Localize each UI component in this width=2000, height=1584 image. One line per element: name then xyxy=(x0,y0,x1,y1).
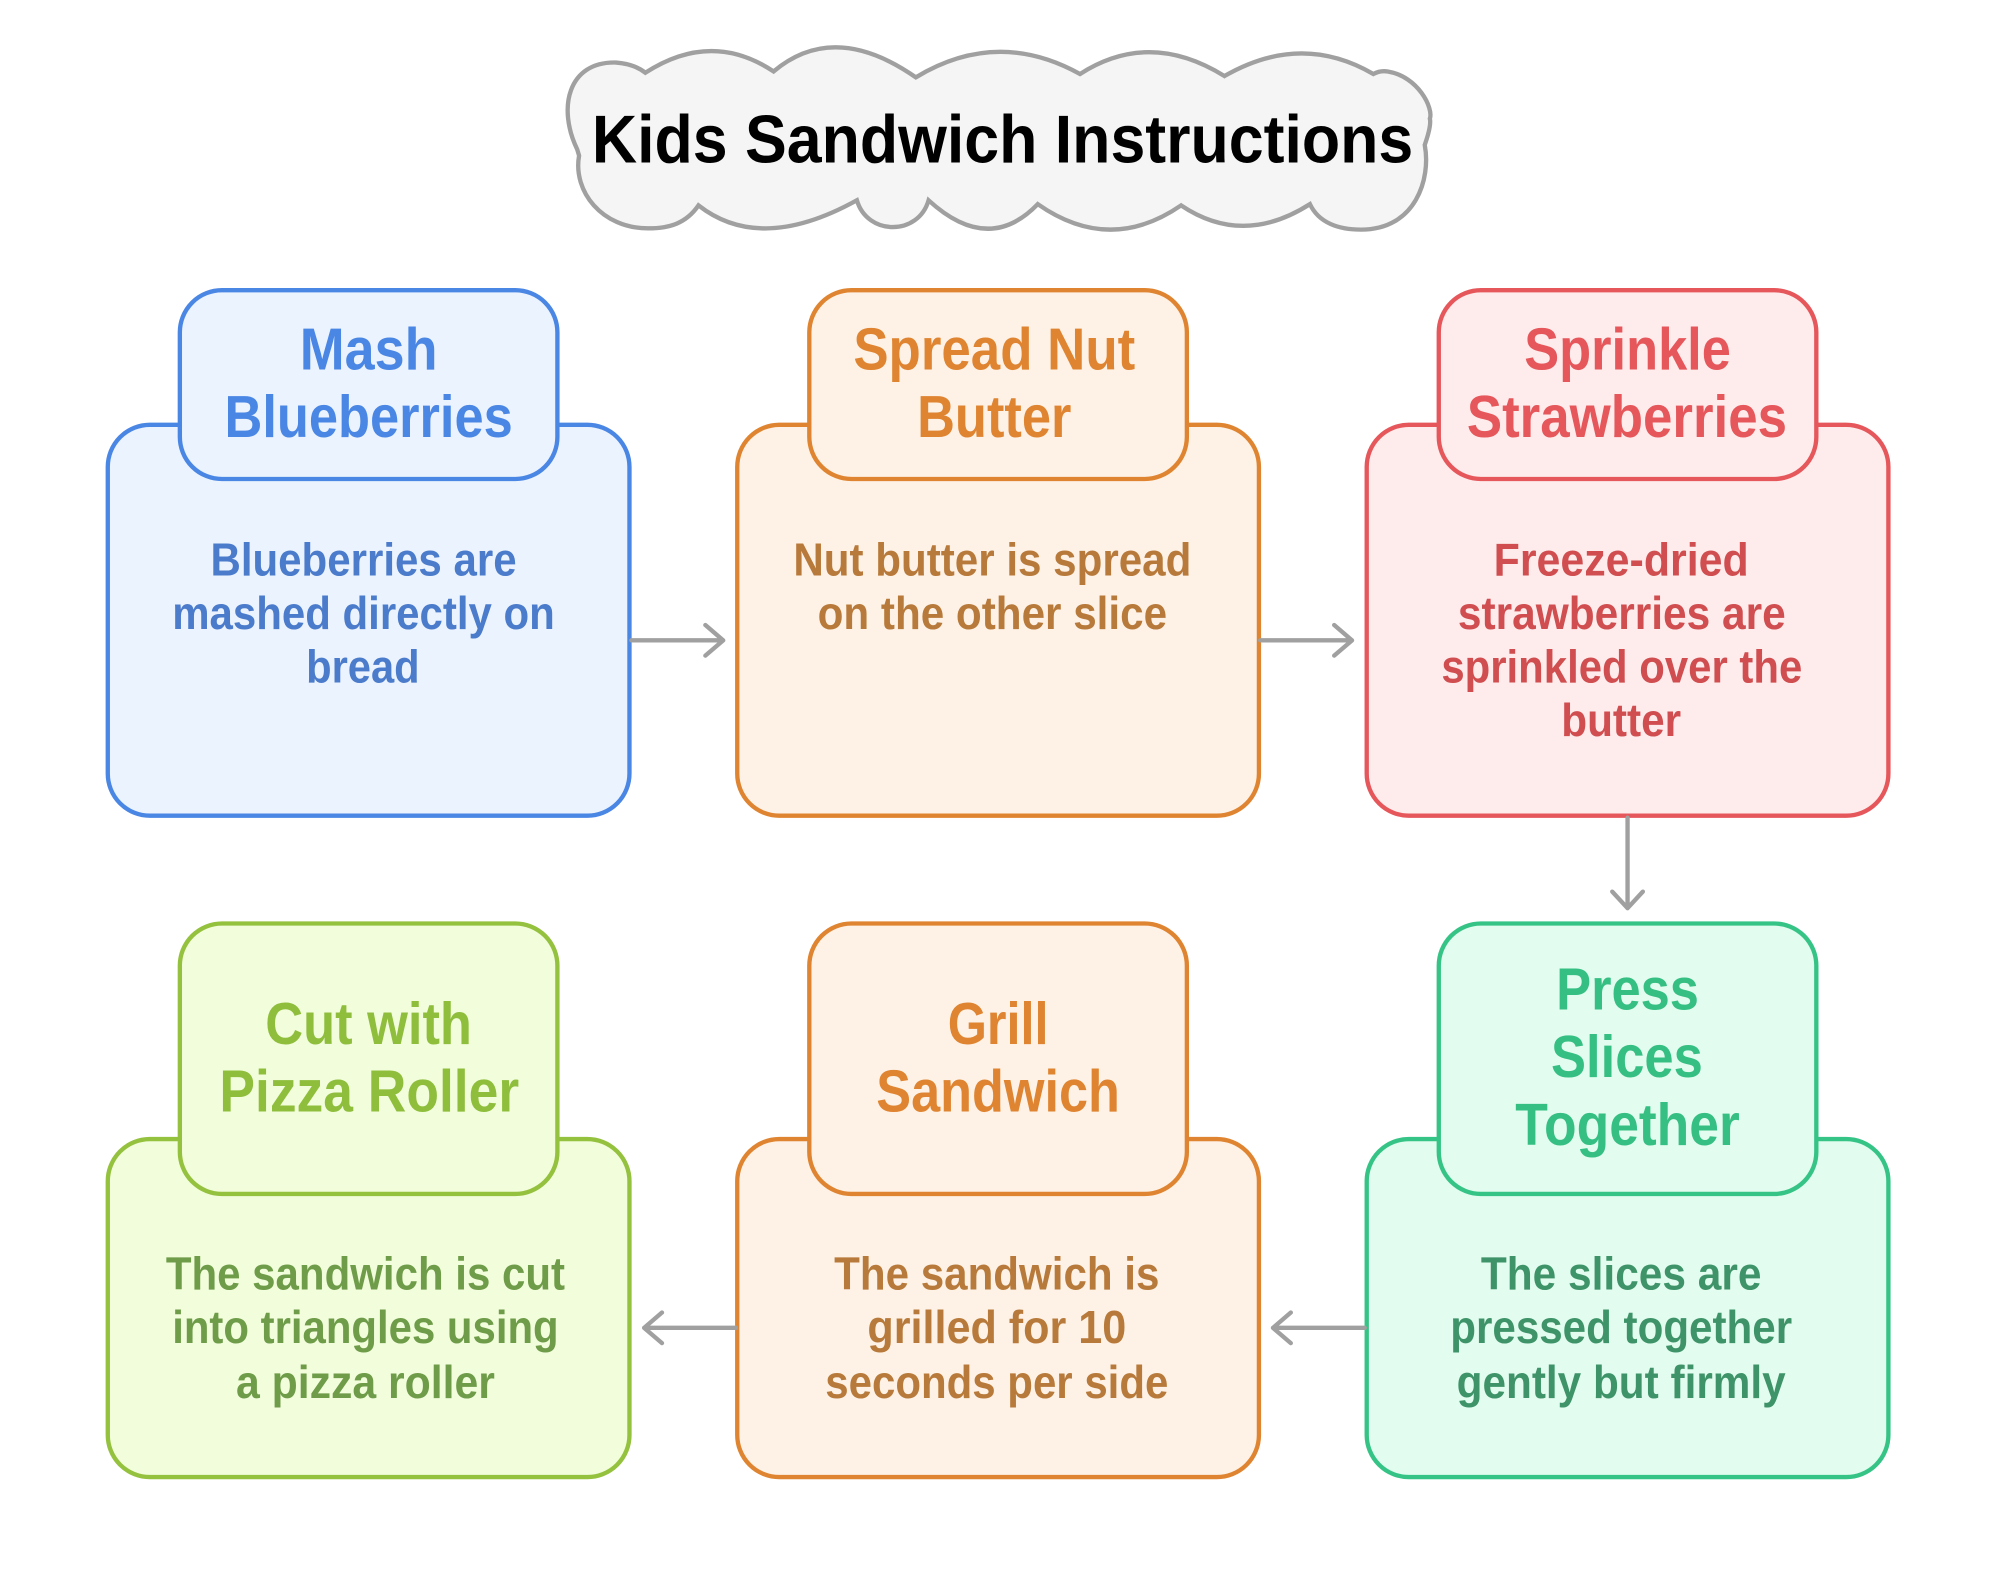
description xyxy=(172,533,555,692)
description: Nut butter is spread xyxy=(793,533,1191,585)
description: mashed directly on xyxy=(172,587,555,639)
panel: Spread Nut Butter xyxy=(737,290,1259,816)
arrow: step 2 to step 3 xyxy=(1260,625,1352,656)
heading: Spread Nut xyxy=(853,315,1135,382)
panel: Mash Blueberries xyxy=(108,290,629,816)
panel header box xyxy=(1439,290,1816,479)
description: pressed together xyxy=(1450,1301,1792,1353)
description xyxy=(1450,1248,1792,1408)
panel: Cut with Pizza Roller xyxy=(108,924,629,1477)
heading: Cut with xyxy=(265,990,472,1057)
description: butter xyxy=(1561,694,1681,746)
heading: Sprinkle xyxy=(1524,315,1731,382)
heading: Sandwich xyxy=(876,1058,1120,1125)
description: on the other slice xyxy=(818,587,1167,639)
heading xyxy=(876,990,1120,1125)
description: bread xyxy=(306,640,420,692)
heading: Press xyxy=(1556,956,1699,1023)
heading: Together xyxy=(1515,1091,1740,1158)
description: into triangles using xyxy=(172,1301,559,1353)
description: a pizza roller xyxy=(236,1356,495,1408)
description: The sandwich is xyxy=(834,1248,1159,1300)
panel header box xyxy=(180,924,557,1194)
heading xyxy=(853,315,1135,450)
panel: Grill Sandwich xyxy=(737,924,1259,1477)
panel: Press Slices Together xyxy=(1367,924,1888,1477)
heading: Pizza Roller xyxy=(219,1058,519,1125)
description: strawberries are xyxy=(1458,587,1786,639)
description: Blueberries are xyxy=(210,533,517,585)
description: gently but firmly xyxy=(1457,1356,1786,1408)
description: Freeze-dried xyxy=(1494,533,1749,585)
heading: Blueberries xyxy=(224,383,513,450)
panel: Sprinkle Strawberries xyxy=(1367,290,1888,816)
title cloud xyxy=(568,47,1430,230)
cloud shape xyxy=(568,47,1430,230)
description xyxy=(166,1248,565,1408)
panel header box xyxy=(809,924,1187,1194)
description: The sandwich is cut xyxy=(166,1248,565,1300)
panel body xyxy=(108,425,629,816)
description: sprinkled over the xyxy=(1441,640,1802,692)
description xyxy=(1441,533,1802,746)
description: seconds per side xyxy=(825,1356,1168,1408)
panel header box xyxy=(1439,924,1816,1194)
heading: Butter xyxy=(917,383,1071,450)
arrow: step 3 to step 4 xyxy=(1612,818,1643,908)
heading: Grill xyxy=(948,990,1048,1057)
heading: Strawberries xyxy=(1467,383,1787,450)
panel body xyxy=(1367,1139,1888,1477)
panel body xyxy=(737,425,1259,816)
heading: Slices xyxy=(1551,1023,1703,1090)
panel header box xyxy=(180,290,557,479)
arrow: step 1 to step 2 xyxy=(631,625,723,656)
description xyxy=(825,1248,1168,1408)
description: The slices are xyxy=(1481,1248,1761,1300)
heading xyxy=(219,990,519,1125)
description: grilled for 10 xyxy=(867,1301,1126,1353)
description xyxy=(793,533,1191,639)
title text: Kids Sandwich Instructions xyxy=(592,103,1413,178)
panel body xyxy=(108,1139,629,1477)
heading xyxy=(224,315,513,450)
heading xyxy=(1467,315,1787,450)
heading xyxy=(1515,956,1740,1158)
panel header box xyxy=(809,290,1187,479)
panel body xyxy=(1367,425,1888,816)
panel body xyxy=(737,1139,1259,1477)
arrow: step 5 to step 6 xyxy=(644,1313,736,1343)
arrow: step 4 to step 5 xyxy=(1273,1313,1365,1343)
heading: Mash xyxy=(300,315,437,382)
